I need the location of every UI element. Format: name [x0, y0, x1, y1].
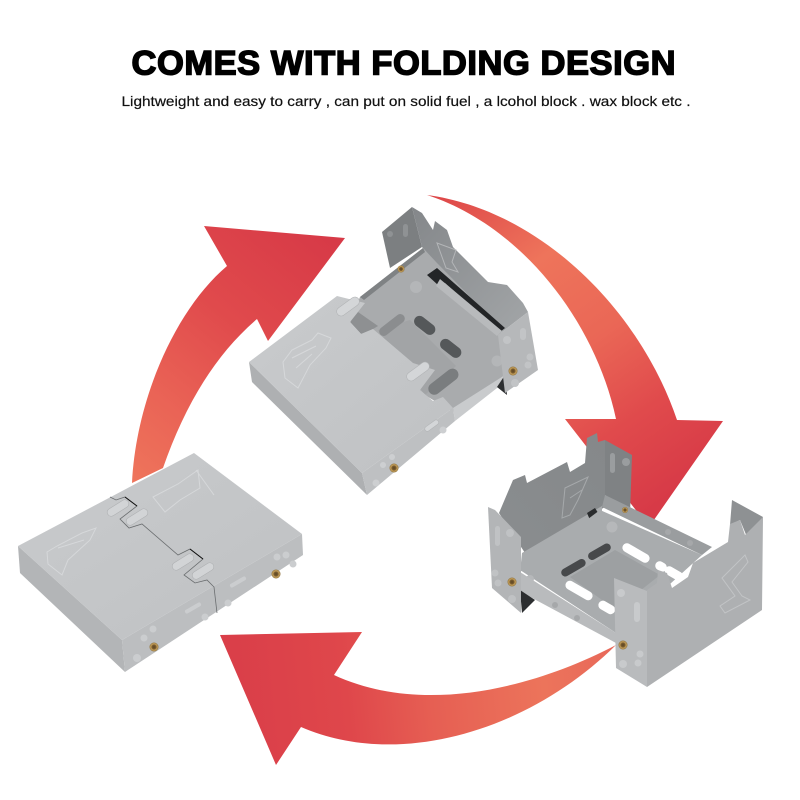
stove: folded — [18, 453, 303, 672]
raised floor centre — [378, 320, 456, 395]
front corner panel — [614, 578, 647, 687]
side rail — [520, 506, 602, 572]
dark slit — [587, 508, 600, 520]
floor edge rail — [453, 375, 506, 421]
back wall emboss — [562, 477, 588, 518]
end panel details — [503, 328, 534, 387]
stove: fully open — [488, 433, 763, 687]
end panel — [498, 312, 538, 393]
front long wall — [647, 517, 763, 687]
screw left — [150, 642, 158, 652]
rear end tab — [730, 500, 763, 537]
dark underside — [520, 590, 535, 613]
back short wall — [605, 440, 632, 515]
dark underside — [497, 375, 507, 395]
lid top face — [249, 296, 453, 473]
back short wall details — [610, 453, 630, 473]
end panel screw — [508, 366, 518, 376]
back screw — [398, 266, 404, 272]
raised floor centre — [570, 550, 660, 610]
left panel screw — [508, 578, 516, 586]
subtitle: Lightweight and easy to carry , can put on solid fuel , a lcohol block . wax block etc . — [122, 93, 690, 109]
lid bumps — [335, 295, 440, 432]
lid screw — [390, 464, 398, 472]
rail dots — [552, 529, 693, 621]
inner rail — [436, 279, 502, 336]
front panel screw — [618, 640, 628, 650]
seam dark sections — [125, 497, 203, 559]
side details — [133, 552, 296, 662]
lid emboss — [283, 333, 331, 388]
left panel details — [492, 526, 516, 603]
back left wall details — [387, 224, 408, 237]
lid notch shadow — [350, 312, 378, 334]
back left wall — [382, 207, 422, 268]
dark gap — [427, 268, 505, 332]
title: COMES WITH FOLDING DESIGN — [132, 44, 676, 82]
arrow: fully open to folded — [220, 632, 616, 765]
left face — [18, 546, 125, 672]
left end panel — [488, 507, 521, 613]
stove: half open — [249, 207, 538, 495]
screw right — [272, 570, 280, 578]
lid left face — [249, 362, 367, 495]
folding seam — [110, 497, 217, 613]
corner panel details — [617, 589, 644, 668]
front rail — [520, 572, 616, 643]
lid right face — [362, 408, 455, 495]
back long wall — [499, 433, 605, 553]
rear rail screw — [622, 507, 628, 513]
floor dimples — [606, 522, 618, 532]
wall emboss — [437, 243, 458, 272]
back long wall — [412, 207, 528, 335]
top face — [18, 453, 302, 640]
arrow: folded to half open — [132, 226, 345, 483]
floor slots — [377, 312, 464, 397]
back rail shadow — [360, 248, 425, 300]
floor dimples — [410, 281, 422, 293]
tray floor — [350, 248, 505, 412]
front wall emboss — [720, 555, 750, 613]
floor — [520, 510, 702, 633]
top bumps — [106, 498, 215, 581]
top emboss — [47, 470, 214, 575]
lid edge details — [372, 426, 446, 486]
right face — [122, 534, 303, 672]
floor slots — [560, 542, 685, 616]
rear rail — [602, 495, 712, 555]
arrow: half open to fully open — [427, 195, 723, 527]
